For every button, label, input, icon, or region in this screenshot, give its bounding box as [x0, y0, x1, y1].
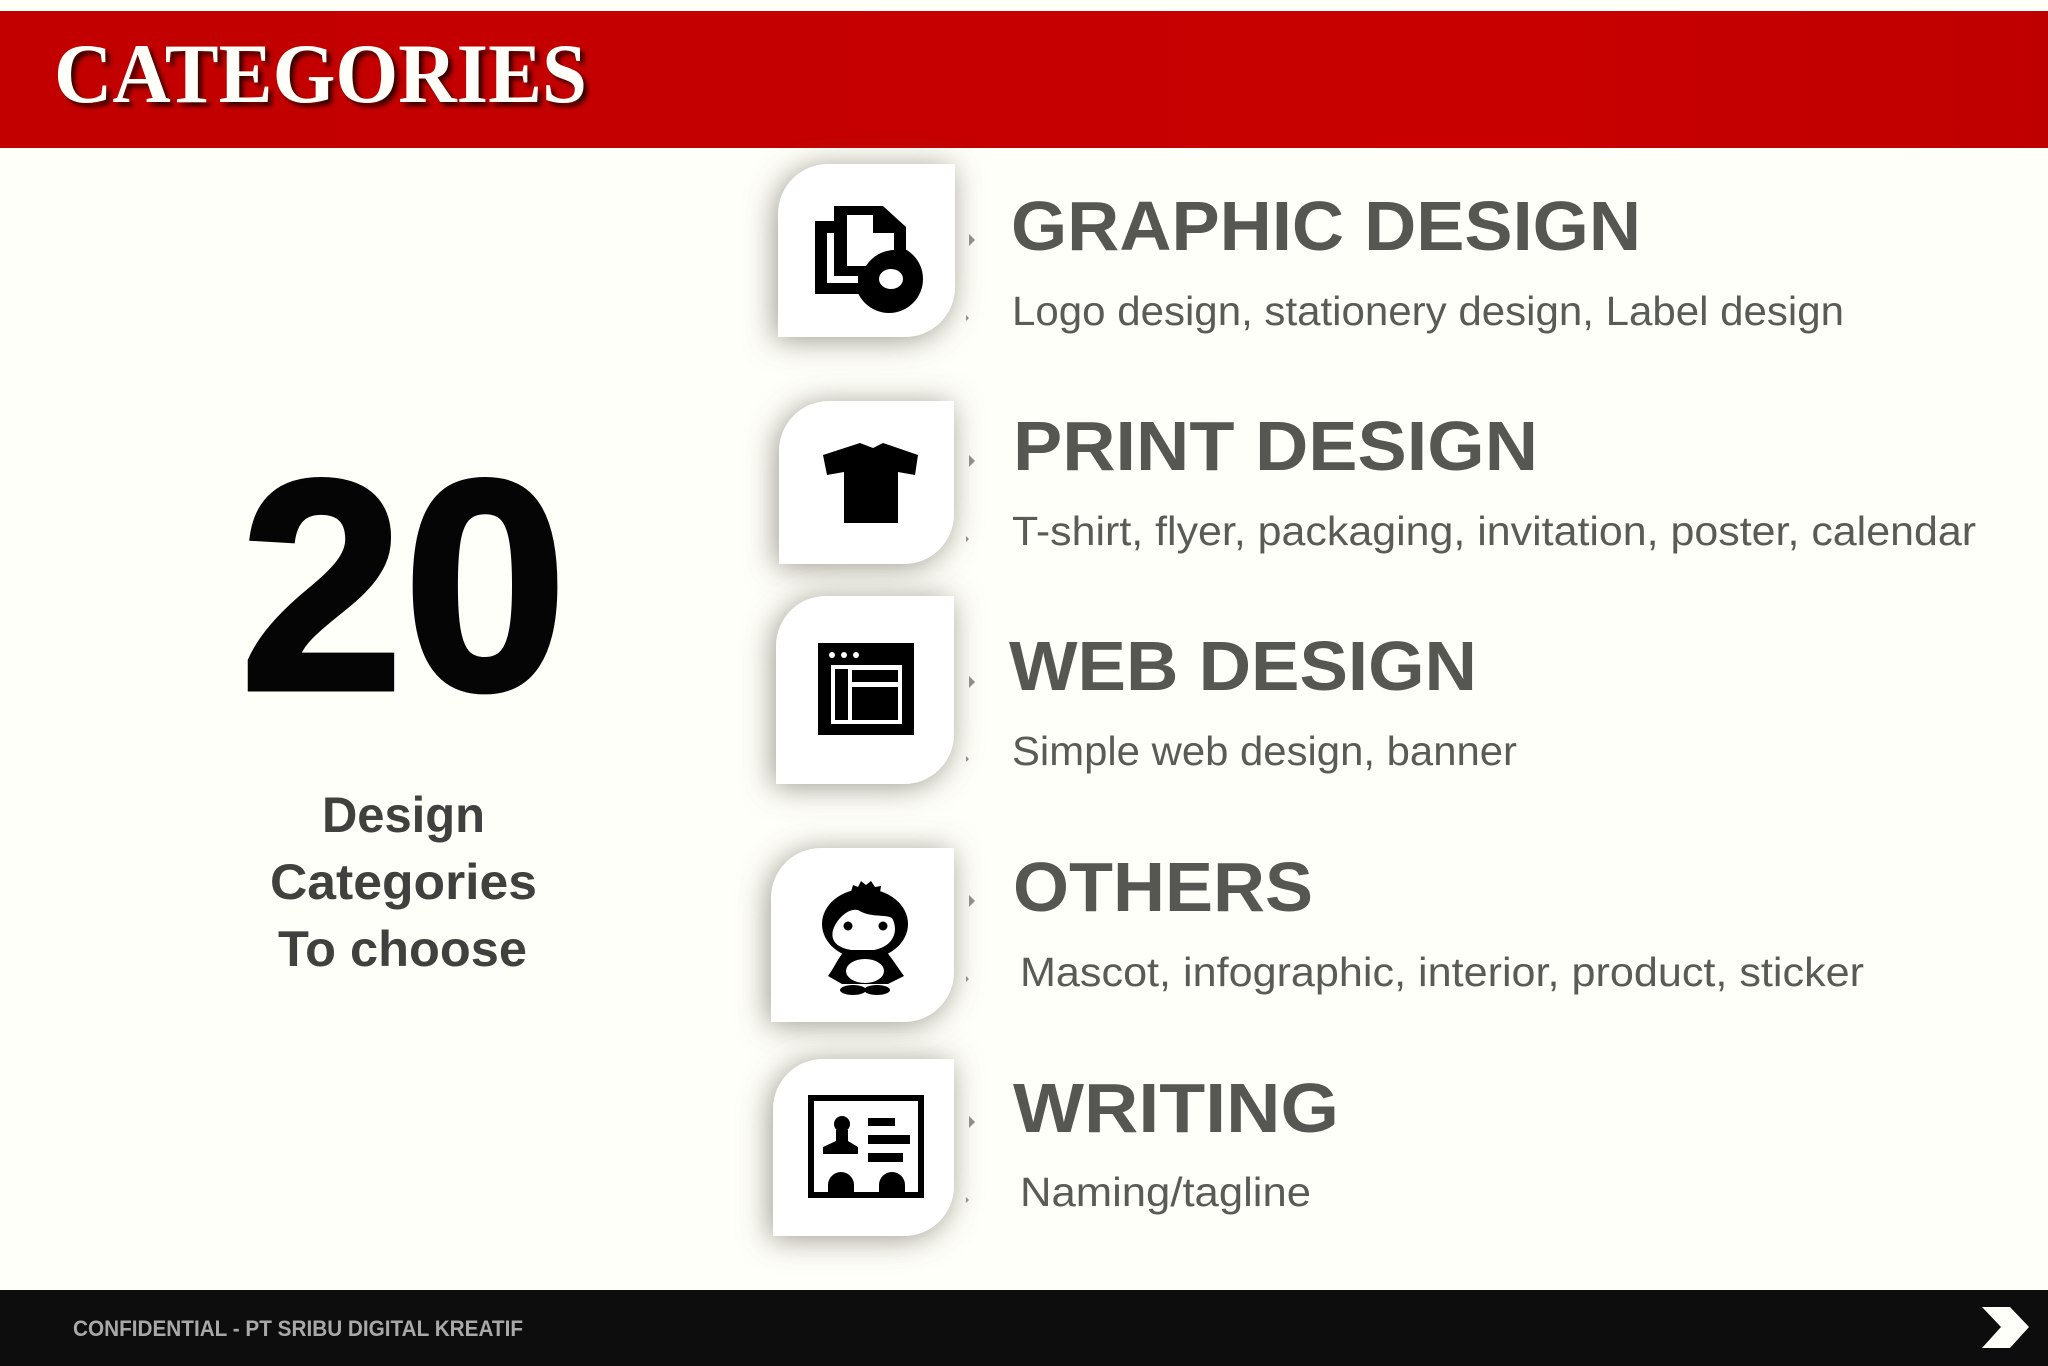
icon: browser window — [818, 643, 914, 735]
icon: mascot — [822, 881, 908, 995]
category: web design: Simple web design, banner — [1012, 728, 1517, 774]
category: print design — [1012, 407, 1976, 554]
footer text: CONFIDENTIAL - PT SRIBU DIGITAL KREATIF — [73, 1316, 523, 1341]
footer bar — [0, 1290, 2048, 1366]
icon: documents and disc — [815, 206, 923, 313]
left caption — [270, 787, 537, 977]
category: others: Mascot, infographic, interior, product, sticker — [1020, 949, 1864, 995]
category: writing: WRITING — [1013, 1069, 1339, 1147]
category: print design: PRINT DESIGN — [1013, 407, 1538, 485]
big number: 20 — [240, 417, 567, 753]
card: others — [771, 848, 954, 1022]
left caption: Categories — [270, 854, 537, 910]
row markers — [966, 234, 975, 1203]
card: web design — [776, 596, 954, 784]
category: web design: WEB DESIGN — [1009, 627, 1477, 705]
card: graphic design — [778, 164, 955, 337]
card: print design — [779, 401, 954, 564]
left caption: Design — [322, 787, 485, 843]
category: writing — [1013, 1069, 1339, 1215]
icon: next chevron — [1982, 1307, 2029, 1348]
icon: id card — [811, 1098, 921, 1196]
card: writing — [773, 1059, 954, 1236]
category: graphic design: GRAPHIC DESIGN — [1011, 187, 1641, 265]
category: web design — [1009, 627, 1517, 774]
category: others: OTHERS — [1013, 848, 1313, 926]
category: graphic design: Logo design, stationery design, Label design — [1012, 288, 1844, 334]
title: CATEGORIES — [54, 27, 587, 121]
category: writing: Naming/tagline — [1020, 1169, 1311, 1215]
icon: t-shirt — [823, 443, 918, 523]
category: print design: T-shirt, flyer, packaging, invitation, poster, calendar — [1012, 508, 1976, 554]
category: graphic design — [1011, 187, 1844, 334]
category: others — [1013, 848, 1864, 995]
left caption: To choose — [278, 921, 527, 977]
header band — [0, 11, 2048, 148]
